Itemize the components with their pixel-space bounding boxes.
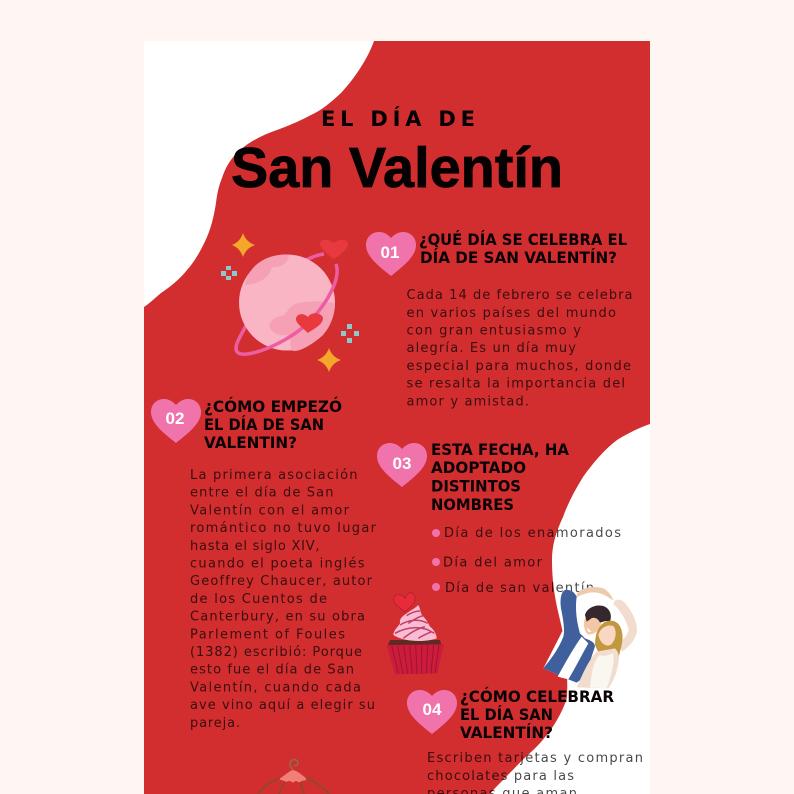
body text 02: cuando el poeta inglés <box>190 556 365 572</box>
body text 02: ave vino aquí a elegir su <box>190 698 375 713</box>
icon: heart 02 <box>151 399 201 443</box>
body text 01: especial para muchos, donde <box>406 359 631 374</box>
body text 02: romántico no tuvo lugar <box>190 521 377 536</box>
body text 02: entre el día de San <box>190 486 334 501</box>
body text 02: esto fue el día de San <box>190 663 354 678</box>
section 02 <box>151 397 377 731</box>
number 04: 04 <box>423 700 442 719</box>
number 01: 01 <box>381 243 399 262</box>
icon: heart planet <box>221 233 359 372</box>
body text 02: La primera asociación <box>190 468 358 483</box>
title <box>231 106 563 200</box>
body text 02: pareja. <box>190 716 240 731</box>
body text 01: se resalta la importancia del <box>406 376 625 392</box>
body text 02: Valentín con el amor <box>190 503 350 518</box>
body text 01: Cada 14 de febrero se celebra <box>406 288 632 303</box>
body text 02: Valentín, cuando cada <box>190 680 361 695</box>
heading 03 <box>431 440 570 514</box>
body text 02: hasta el siglo XIV, <box>190 539 320 554</box>
body text 02: Parlement of Foules <box>190 627 345 642</box>
body text 01 <box>406 288 632 410</box>
body text 02: de los Cuentos de <box>190 592 327 607</box>
heading 03: ESTA FECHA, HA <box>431 440 570 459</box>
heading 04 <box>460 687 614 742</box>
body text 02: Canterbury, en su obra <box>190 610 365 625</box>
body text 04: Escriben tarjetas y compran <box>427 751 643 766</box>
number 02: 02 <box>166 409 184 428</box>
bullet list <box>432 526 621 596</box>
heading 01 <box>419 230 627 267</box>
number 03: 03 <box>393 454 411 473</box>
icon: heart 01 <box>366 232 416 276</box>
subtitle: el día de: EL DÍA DE <box>321 106 475 131</box>
heading 03: DISTINTOS <box>431 476 521 496</box>
icon: cupcake <box>387 593 444 674</box>
body text 01: con gran entusiasmo y <box>406 324 581 338</box>
heading 02 <box>204 397 342 452</box>
section 04 <box>407 687 643 794</box>
heading 03: NOMBRES <box>431 495 514 514</box>
section 03 <box>377 440 621 596</box>
heading 01: ¿QUÉ DÍA SE CELEBRA EL <box>419 230 627 249</box>
body text 02: (1382) escribió: Porque <box>190 645 362 660</box>
heading 02: EL DÍA DE SAN <box>204 415 324 434</box>
panel: red wave background <box>144 41 650 794</box>
icon: heart 03 <box>377 443 427 487</box>
main title: San Valentín: San Valentín <box>231 136 563 200</box>
body text 04: chocolates para las <box>427 769 574 784</box>
heading 04: ¿CÓMO CELEBRAR <box>460 687 614 706</box>
bullet list: Día de los enamorados <box>444 526 621 541</box>
body text 01: en varios países del mundo <box>406 306 616 321</box>
icon: birdcage top <box>258 760 329 794</box>
heading 04: VALENTÍN? <box>460 723 553 742</box>
body text 02 <box>190 468 377 731</box>
body text 02: Geoffrey Chaucer, autor <box>190 574 373 589</box>
body text 01: alegría. Es un día muy <box>406 341 576 356</box>
icon: heart 04 <box>407 690 457 734</box>
icon: couple making a heart <box>543 587 637 690</box>
bullet list: Día del amor <box>443 556 543 570</box>
section 01 <box>366 230 632 410</box>
heading 02: VALENTIN? <box>204 433 297 452</box>
heading 02: ¿CÓMO EMPEZÓ <box>204 397 342 416</box>
heading 04: EL DÍA SAN <box>460 705 553 724</box>
body text 01: amor y amistad. <box>406 394 529 410</box>
heading 03: ADOPTADO <box>431 458 526 477</box>
heading 01: DÍA DE SAN VALENTÍN? <box>420 248 617 267</box>
bullet list: Día de san valentín <box>445 581 594 596</box>
panel: white card <box>144 41 650 794</box>
body text 04 <box>427 751 643 794</box>
